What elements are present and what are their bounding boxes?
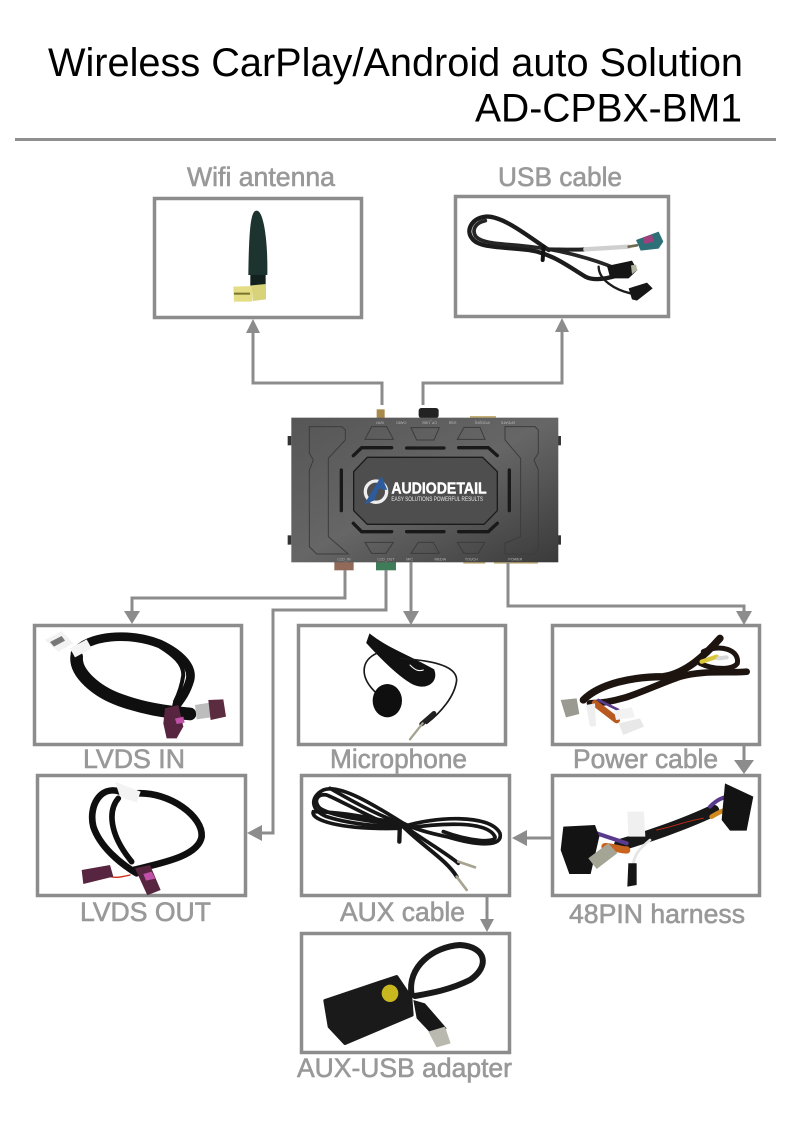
port labels bottom: TOUCH	[465, 557, 478, 561]
panel: Microphone	[298, 626, 506, 774]
arrow: device to power cable	[508, 562, 752, 625]
label: AUX-USB adapter: AUX-USB adapter	[297, 1053, 512, 1083]
panel: 48PIN harness	[552, 776, 760, 929]
embossed panels	[309, 427, 538, 554]
icon: USB cable	[469, 217, 663, 301]
panel: AUX cable	[302, 776, 510, 927]
label: AUX cable: AUX cable	[340, 897, 465, 927]
logo text: AUDIODETAIL	[391, 480, 487, 497]
side screws	[288, 436, 561, 545]
title: Wireless CarPlay/Android auto Solution	[48, 41, 743, 85]
device: CarPlay interface box: EASY SOLUTIONS POWERFUL RESULTS	[391, 497, 483, 503]
connectors	[334, 408, 538, 570]
arrow: 48PIN harness to AUX cable	[512, 830, 551, 846]
arrow: device to microphone	[403, 562, 419, 625]
port labels top: USB	[448, 420, 456, 424]
icon: 48PIN harness	[561, 783, 753, 887]
arrow: device to USB cable	[423, 318, 569, 405]
device: CarPlay interface box	[288, 408, 561, 570]
panel: wifi antenna	[154, 162, 362, 318]
arrow: device to LVDS IN	[124, 570, 345, 624]
icon: AUX-USB adapter	[325, 945, 483, 1047]
icon: wifi antenna	[233, 211, 267, 302]
port labels top: WIFI	[376, 420, 384, 424]
port labels top: CARD	[396, 420, 407, 424]
panel: AUX-USB adapter	[297, 934, 512, 1083]
arrow: device to wifi antenna	[246, 319, 382, 405]
port labels bottom: LCD_IN	[337, 557, 351, 561]
port labels bottom: MEDIA	[435, 557, 447, 561]
panel: USB cable	[456, 162, 668, 316]
port labels top: iPOD(IN)	[475, 420, 490, 424]
port labels top: CP_USB	[422, 420, 437, 424]
label: LVDS IN: LVDS IN	[83, 744, 185, 774]
label: wifi antenna: Wifi antenna	[187, 162, 335, 192]
port labels bottom: MIC	[406, 557, 413, 561]
logo mark	[364, 476, 387, 505]
icon: power cable	[561, 638, 747, 735]
port labels top	[376, 420, 515, 424]
arrow: power cable to 48PIN harness	[734, 746, 754, 774]
arrow: AUX cable to adapter	[480, 896, 494, 932]
label: Microphone: Microphone	[330, 744, 467, 774]
logo plate	[354, 457, 497, 524]
panel: Power cable	[552, 626, 760, 774]
icon: AUX cable	[313, 788, 500, 890]
port labels bottom: LCD_OUT	[377, 557, 395, 561]
title: AD-CPBX-BM1	[475, 86, 742, 130]
arrow: device to LVDS OUT	[247, 570, 386, 841]
label: USB cable: USB cable	[498, 162, 622, 192]
icon: LVDS IN harness	[45, 631, 226, 738]
port labels top: UPDATE	[500, 420, 515, 424]
panel: LVDS OUT	[38, 776, 246, 927]
black slots	[341, 448, 509, 532]
title	[48, 41, 743, 130]
panel: LVDS IN	[34, 626, 242, 774]
icon: microphone	[364, 635, 457, 739]
label: 48PIN harness: 48PIN harness	[569, 899, 745, 929]
label: Power cable: Power cable	[573, 744, 718, 774]
port labels bottom: POWER	[508, 557, 523, 561]
label: LVDS OUT: LVDS OUT	[80, 897, 211, 927]
port labels bottom	[337, 557, 523, 561]
icon: LVDS OUT harness	[82, 782, 202, 895]
